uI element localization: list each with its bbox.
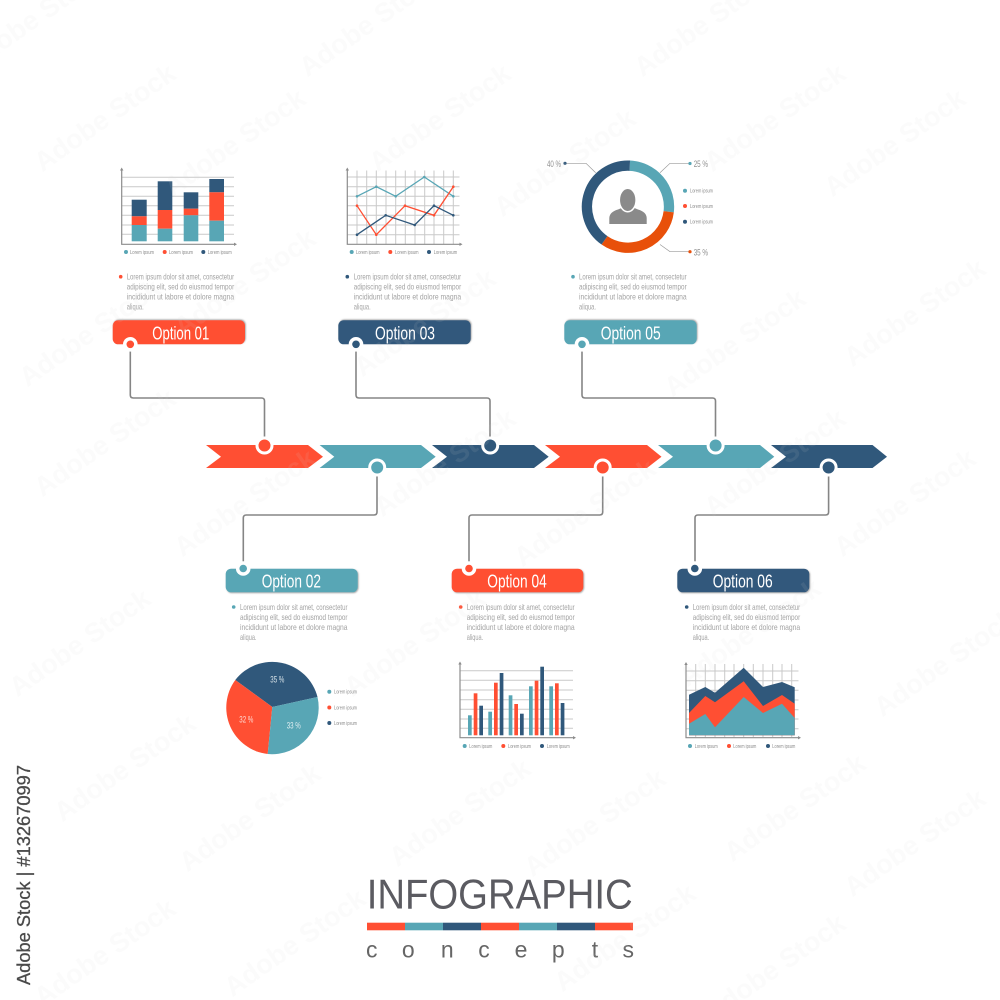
donut chart: Lorem ipsum <box>690 189 713 195</box>
pie chart: Lorem ipsum <box>334 690 357 696</box>
panel: option 03 <box>338 168 471 352</box>
watermark: Adobe Stock <box>839 782 992 902</box>
description text: incididunt ut labore et dolore magna <box>127 292 234 302</box>
description text: Lorem ipsum dolor sit amet, consectetur <box>240 602 348 612</box>
description text: adipiscing elit, sed do eiusmod tempor <box>693 612 800 622</box>
pie chart: 32 % <box>239 714 254 725</box>
option label: Option 04 <box>487 570 547 591</box>
watermark: Adobe Stock <box>674 572 827 692</box>
description text: aliqua. <box>467 632 483 642</box>
description text: incididunt ut labore et dolore magna <box>240 622 348 632</box>
donut chart <box>547 159 713 258</box>
area chart <box>684 662 801 750</box>
watermark: Adobe Stock <box>719 747 872 867</box>
watermark: Adobe Stock <box>829 442 982 562</box>
grouped bar chart: Lorem ipsum <box>469 744 492 750</box>
line chart: Lorem ipsum <box>395 250 418 256</box>
description text: aliqua. <box>693 632 709 642</box>
panel: option 05 <box>547 159 713 352</box>
watermark: Adobe Stock <box>159 82 312 202</box>
grouped bar chart: Lorem ipsum <box>547 744 570 750</box>
stacked bar chart: Lorem ipsum <box>169 250 193 256</box>
description text: aliqua. <box>579 302 596 312</box>
watermark: Adobe Stock <box>4 582 157 702</box>
description text: incididunt ut labore et dolore magna <box>579 292 687 302</box>
description text <box>232 602 348 642</box>
watermark: Adobe Stock <box>489 102 642 222</box>
watermark: Adobe Stock <box>519 762 672 882</box>
line chart: Lorem ipsum <box>356 250 380 256</box>
watermark: Adobe Stock <box>29 382 182 502</box>
description text: aliqua. <box>240 632 256 642</box>
title color stripe <box>367 923 633 930</box>
area chart: Lorem ipsum <box>695 744 718 750</box>
option label <box>338 320 471 352</box>
donut chart: 25 % <box>694 159 708 170</box>
arrow 6 <box>771 445 887 468</box>
watermark: Adobe Stock <box>509 452 662 572</box>
watermark: Adobe Stock <box>699 402 852 522</box>
description text: incididunt ut labore et dolore magna <box>467 622 575 632</box>
arrow 3 <box>432 445 549 468</box>
watermark: Adobe Stock <box>339 582 492 702</box>
panel: option 04 <box>452 561 583 750</box>
donut chart: 40 % <box>547 159 561 170</box>
watermark: Adobe Stock <box>364 57 517 177</box>
description text: Lorem ipsum dolor sit amet, consectetur <box>354 272 461 282</box>
option label: Option 03 <box>375 322 435 343</box>
watermark: Adobe Stock <box>174 757 327 877</box>
description text: aliqua. <box>354 302 371 312</box>
line chart <box>346 168 462 256</box>
option label: Option 02 <box>262 570 321 591</box>
donut chart: Lorem ipsum <box>690 220 713 226</box>
description text: adipiscing elit, sed do eiusmod tempor <box>579 282 687 292</box>
description text: Lorem ipsum dolor sit amet, consectetur <box>127 272 234 282</box>
description text: adipiscing elit, sed do eiusmod tempor <box>467 612 575 622</box>
watermark: Adobe Stock <box>169 222 322 342</box>
option label: Option 06 <box>713 570 773 591</box>
option label <box>452 561 583 592</box>
watermark: Adobe Stock <box>169 442 322 562</box>
watermark: Adobe Stock <box>384 752 537 872</box>
description text: adipiscing elit, sed do eiusmod tempor <box>240 612 348 622</box>
watermark: Adobe Stock <box>699 57 852 177</box>
watermark: Adobe Stock <box>29 57 182 177</box>
option label: Option 01 <box>152 322 209 343</box>
stock id side text: Adobe Stock | #132670997 <box>14 765 34 985</box>
line chart: Lorem ipsum <box>434 250 457 256</box>
arrow 5 <box>658 445 774 468</box>
grouped bar chart <box>458 662 576 750</box>
watermark: Adobe Stock <box>14 272 167 392</box>
watermark: Adobe Stock <box>839 252 992 372</box>
stacked bar chart: Lorem ipsum <box>208 250 232 256</box>
description text: aliqua. <box>127 302 144 312</box>
description text <box>685 602 800 642</box>
timeline markers <box>257 438 836 475</box>
description text: Lorem ipsum dolor sit amet, consectetur <box>467 602 575 612</box>
watermark: Adobe Stock <box>49 707 202 827</box>
description text: Lorem ipsum dolor sit amet, consectetur <box>579 272 687 282</box>
title: INFOGRAPHIC <box>367 870 633 917</box>
panel: option 02 <box>226 561 358 754</box>
arrow 2 <box>320 445 436 468</box>
arrow 4 <box>545 445 662 468</box>
pie chart <box>226 662 357 754</box>
donut chart: 35 % <box>694 248 708 258</box>
description text: incididunt ut labore et dolore magna <box>354 292 461 302</box>
panel: option 06 <box>677 561 809 750</box>
area chart: Lorem ipsum <box>733 744 756 750</box>
description text: Lorem ipsum dolor sit amet, consectetur <box>693 602 800 612</box>
watermark: Adobe Stock <box>659 282 812 402</box>
watermark: Adobe Stock <box>369 402 522 522</box>
watermark: Adobe Stock <box>349 262 502 382</box>
icon: person <box>609 188 647 224</box>
option label: Option 05 <box>601 322 661 343</box>
pie chart: Lorem ipsum <box>334 706 357 712</box>
arrow 1 <box>206 445 323 468</box>
option label <box>677 561 809 592</box>
description text: adipiscing elit, sed do eiusmod tempor <box>127 282 234 292</box>
grouped bar chart: Lorem ipsum <box>508 744 531 750</box>
option label <box>113 320 245 352</box>
description text: adipiscing elit, sed do eiusmod tempor <box>354 282 461 292</box>
pie chart: Lorem ipsum <box>334 721 357 727</box>
donut chart: Lorem ipsum <box>690 204 713 210</box>
description text: incididunt ut labore et dolore magna <box>693 622 800 632</box>
pie chart: 35 % <box>270 675 285 686</box>
watermark: Adobe Stock <box>219 882 372 1000</box>
timeline arrows <box>206 445 887 468</box>
area chart: Lorem ipsum <box>772 744 795 750</box>
panel: option 01 <box>113 168 245 352</box>
connector lines <box>130 348 829 565</box>
stacked bar chart: Lorem ipsum <box>130 250 154 256</box>
option label <box>226 561 358 592</box>
watermark: Adobe Stock <box>819 82 972 202</box>
description text <box>459 602 575 642</box>
description text <box>119 272 234 312</box>
description text <box>571 272 687 312</box>
watermark: Adobe Stock <box>549 877 702 997</box>
stacked bar chart <box>120 168 237 256</box>
pie chart: 33 % <box>287 721 301 732</box>
subtitle: concepts <box>366 936 634 962</box>
description text <box>346 272 461 312</box>
option label <box>564 320 697 352</box>
